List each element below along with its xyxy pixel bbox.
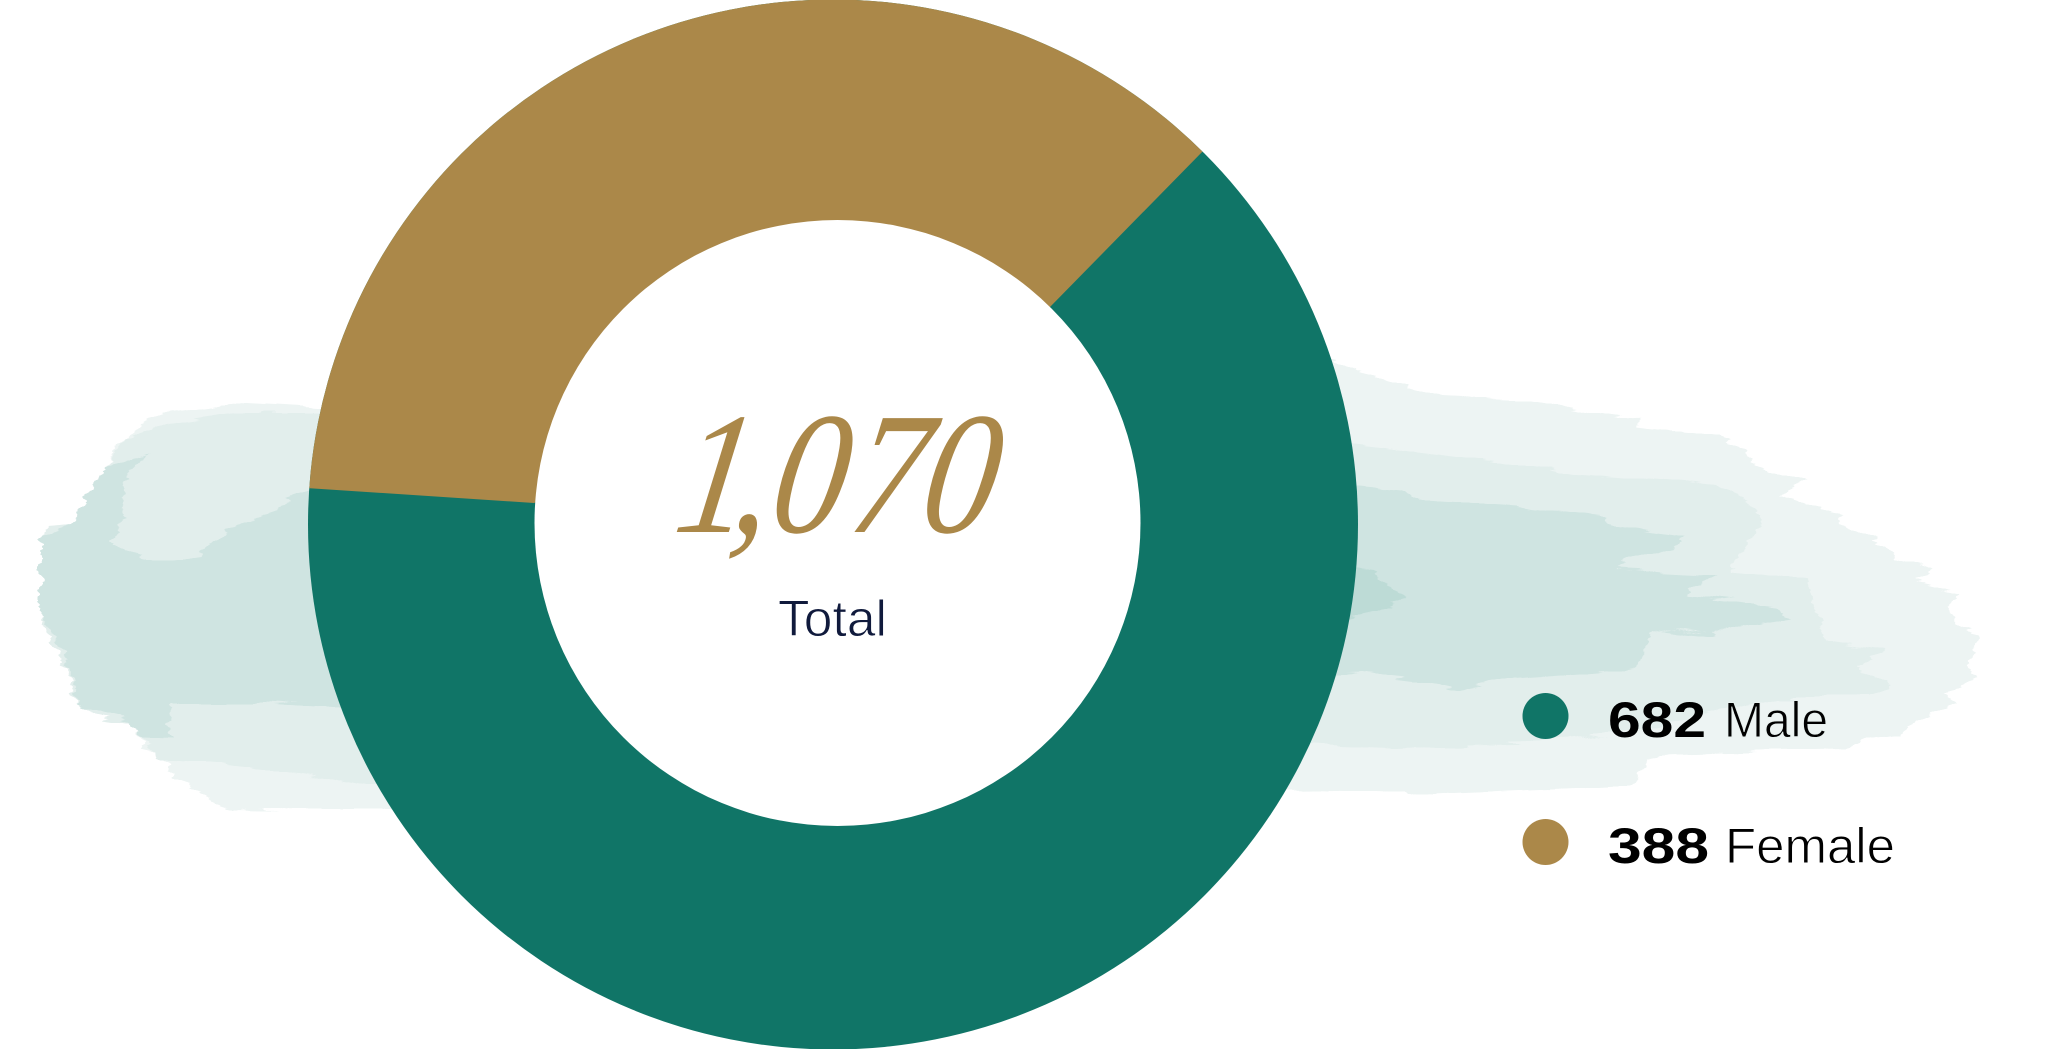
legend marker: male	[1522, 693, 1568, 739]
brush: darkest patch	[1340, 565, 1405, 619]
donut chart	[308, 0, 1358, 1049]
legend label: female: Female	[1725, 818, 1895, 874]
donut segment: male	[308, 0, 1358, 1049]
legend value: male: 682	[1608, 692, 1706, 748]
legend value: female: 388	[1608, 818, 1709, 874]
total label: Total	[778, 590, 887, 647]
donut segment: female	[309, 0, 1202, 503]
legend marker: female	[1522, 819, 1568, 865]
legend: male	[1522, 692, 1828, 748]
brush: darker core	[40, 455, 1791, 738]
legend label: male: Male	[1724, 692, 1828, 748]
background brush stroke	[40, 360, 1982, 811]
brush: middle layer	[40, 413, 1892, 787]
total value: 1,070	[665, 378, 1015, 571]
brush: lightest layer	[40, 360, 1982, 811]
legend: female	[1522, 818, 1895, 874]
donut centre hole	[534, 220, 1140, 826]
